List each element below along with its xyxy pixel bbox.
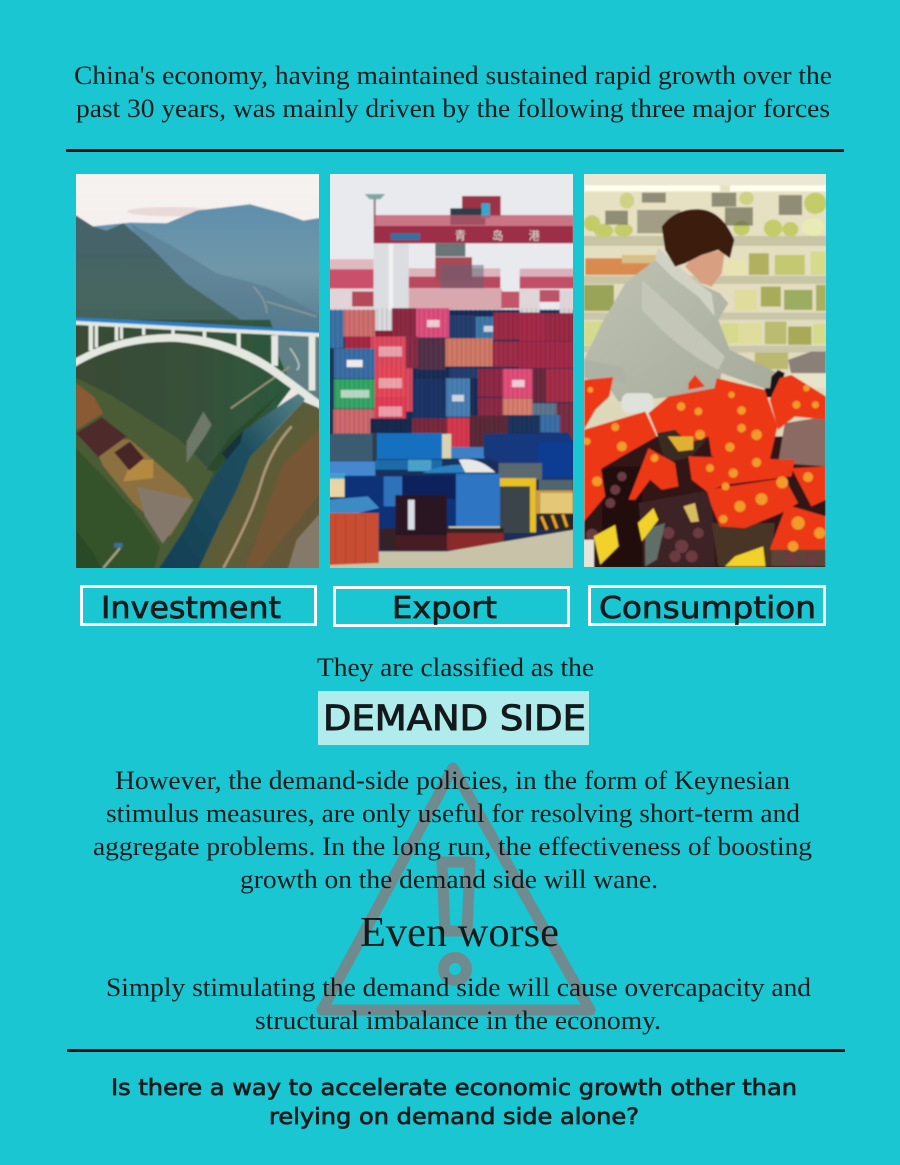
closing question	[111, 1076, 797, 1130]
label: Export: Export	[392, 591, 497, 626]
title text: past 30 years, was mainly driven by the following three major forces	[76, 94, 830, 123]
bridge	[70, 317, 323, 335]
divider: top rule	[66, 149, 844, 152]
title text	[74, 61, 832, 123]
container stack	[325, 310, 343, 348]
photo: woman shopping in a supermarket	[584, 174, 826, 567]
river	[156, 392, 305, 573]
photo: shipping containers and gantry crane at Qingdao port: 青	[455, 227, 466, 243]
heading: demand side: DEMAND SIDE	[323, 699, 586, 739]
right bank	[197, 401, 323, 573]
text: demand-side policies paragraph: However, the demand-side policies, in the form of Keynesian	[115, 766, 790, 795]
heading: even worse: Even worse	[360, 910, 559, 956]
text: classified as: They are classified as the	[317, 653, 594, 682]
orange spots	[583, 385, 825, 552]
closing question: Is there a way to accelerate economic growth other than	[111, 1076, 797, 1101]
background cranes	[325, 259, 374, 269]
shelves	[579, 236, 831, 246]
tarped cargo	[325, 434, 373, 461]
left bank	[70, 375, 213, 573]
photo: shipping containers and gantry crane at Qingdao port	[330, 174, 573, 568]
produce	[584, 192, 827, 237]
label: Investment	[82, 586, 316, 626]
text: demand-side policies paragraph: stimulus measures, are only useful for resolving short-term and	[106, 799, 800, 828]
main crane	[374, 243, 409, 331]
text: overcapacity paragraph: Simply stimulating the demand side will cause overcapacity and	[106, 973, 811, 1002]
red mesh bags	[584, 375, 826, 550]
text: demand-side policies paragraph: aggregate problems. In the long run, the effectiveness of boosting	[93, 832, 812, 861]
text: demand-side policies paragraph	[93, 766, 812, 894]
heading: demand side	[318, 691, 589, 745]
text: demand-side policies paragraph: growth on the demand side will wane.	[240, 865, 658, 894]
title text: China's economy, having maintained sustained rapid growth over the	[74, 61, 832, 90]
container markings	[341, 320, 525, 416]
grapes	[586, 472, 818, 566]
closing question: relying on demand side alone?	[269, 1105, 639, 1130]
photo: shipping containers and gantry crane at Qingdao port: 岛	[492, 227, 503, 243]
text: overcapacity paragraph: structural imbalance in the economy.	[255, 1006, 661, 1035]
photo: railway bridge over a river gorge	[76, 174, 319, 568]
photo: shipping containers and gantry crane at Qingdao port: 港	[529, 227, 541, 243]
label: Export	[334, 588, 568, 626]
container ribs	[325, 308, 573, 446]
hill right of cliff	[207, 390, 283, 471]
divider: bottom rule	[67, 1049, 845, 1052]
label: Consumption: Consumption	[599, 591, 816, 626]
label: Investment: Investment	[101, 591, 281, 626]
woman coat	[584, 248, 778, 401]
yellow labels	[668, 436, 693, 451]
foreground containers	[380, 528, 504, 550]
dark produce base	[584, 436, 826, 570]
icon: warning triangle watermark	[322, 768, 590, 1010]
hair and face	[685, 250, 725, 287]
text: overcapacity paragraph	[106, 973, 811, 1035]
